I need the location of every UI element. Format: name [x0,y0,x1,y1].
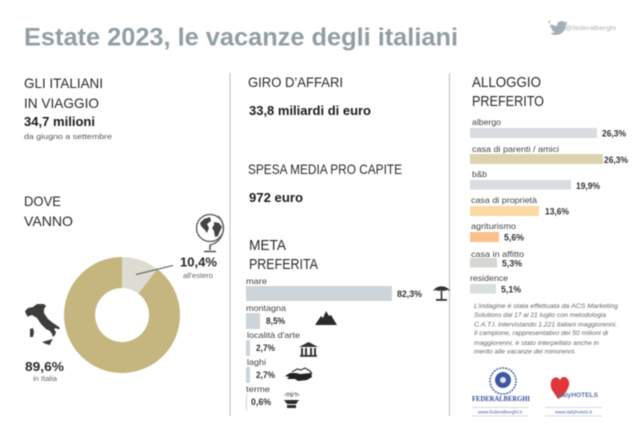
bar: agriturismo [470,221,524,242]
bar: mare: 82,3% [397,289,422,299]
logo: italyhotels: ItalyHOTELS [558,392,599,399]
value: estero: 10,4% [180,254,217,270]
bar: residence [470,273,521,294]
donut chart [64,257,180,373]
icon: twitter bird [548,20,568,35]
twitter handle [548,20,616,35]
heading: GIRO D’AFFARI [248,74,343,90]
bar: b&b: b&b [472,169,487,179]
panel: alloggio preferito: PREFERITO [472,93,544,110]
bar: agriturismo: agriturismo [471,221,516,231]
leader line [136,266,173,274]
bar: casa in affitto [470,249,524,268]
panel: gli italiani in viaggio: IN VIAGGIO [24,95,99,111]
methodology note: Il campione, rappresentativo dei 50 milioni di [474,330,609,337]
panel: dove vanno: all'estero [183,273,213,280]
heading: DOVE [24,193,61,209]
bar: località d'arte [246,330,300,356]
bar: casa di proprietà: casa di proprietà [471,195,537,205]
methodology note: maggiorenni, è stato interpellato anche in [474,340,599,347]
bar: laghi: laghi [247,357,266,367]
panel: meta preferita: PREFERITA [249,256,318,273]
bar: montagna: 8,5% [266,316,285,326]
bar: agriturismo: 5,6% [504,232,524,242]
icon: globe [196,214,224,252]
methodology note: C.A.T.I. intervistando 1.221 italiani maggiorenni. [474,322,617,328]
bar: casa in affitto: casa in affitto [471,249,524,259]
column dividers [230,73,450,416]
bar: albergo: albergo [472,117,501,127]
bar: residence: 5,1% [501,284,521,294]
heading: ALLOGGIO [472,74,541,91]
methodology note: merito alle vacanze dei minorenni. [474,348,576,356]
bar: località d'arte: 2,7% [256,343,275,353]
bar: laghi: 2,7% [256,370,275,380]
panel: gli italiani in viaggio [24,75,112,141]
bar: casa di parenti / amici [470,144,628,165]
panel: meta preferita [246,237,450,410]
icon: italy map [25,304,60,345]
panel: dove vanno: VANNO [24,213,73,229]
title: Estate 2023, le vacanze degli italiani [24,24,458,52]
bar: terme: 0,6% [251,397,271,407]
logo: federalberghi: www.federalberghi.it [478,410,523,414]
panel: gli italiani in viaggio: da giugno a settembre [24,132,112,141]
value: 972 euro [249,191,303,205]
bar: casa di parenti / amici: casa di parenti / amici [472,144,559,154]
value: italia: 89,6% [25,359,64,374]
bar: terme [246,384,271,410]
icon: temple [299,342,318,357]
bar: mare [246,276,422,301]
panel: dove vanno [24,193,224,383]
twitter handle: @federalberghi [565,25,616,32]
bar: montagna: montagna [246,303,286,313]
bar: casa di proprietà [470,195,569,216]
icon: mountains [315,311,337,325]
logo: italyhotels [545,377,602,416]
icon: fountain [284,392,299,408]
bar: residence: residence [470,273,508,283]
panel: dove vanno: in Italia [33,376,57,383]
bar: casa di parenti / amici: 26,3% [604,155,628,165]
value: 33,8 miliardi di euro [249,104,371,118]
methodology note: Solutions dal 17 al 21 luglio con metodologia [474,312,606,319]
bar: b&b: 19,9% [576,181,600,191]
heading: SPESA MEDIA PRO CAPITE [248,161,402,177]
methodology note [474,303,618,356]
icon: beach umbrella [433,286,450,301]
bar: mare: mare [246,276,267,286]
panel: giro d'affari [248,74,371,118]
bar: albergo [470,117,626,138]
panel: spesa media [248,161,402,205]
logo: federalberghi [472,368,530,416]
bar: b&b [470,169,600,191]
bar: terme: terme [246,384,270,394]
bar: casa di proprietà: 13,6% [545,206,569,216]
logo: italyhotels: www.italyhotels.it [555,410,593,414]
value: 34,7 milioni [24,115,95,129]
methodology note: L’indagine è stata effettuata da ACS Marketing [474,303,618,310]
bar: albergo: 26,3% [602,128,626,138]
logo: federalberghi: FEDERALBERGHI [472,395,530,403]
bar: località d'arte: località d'arte [247,330,300,340]
panel: alloggio preferito [470,74,628,294]
icon: lake [285,368,312,381]
heading: GLI ITALIANI [24,75,103,91]
bar: laghi [246,357,275,383]
bar: montagna [246,303,286,329]
heading: META [249,237,286,254]
bar: casa in affitto: 5,3% [502,258,522,268]
